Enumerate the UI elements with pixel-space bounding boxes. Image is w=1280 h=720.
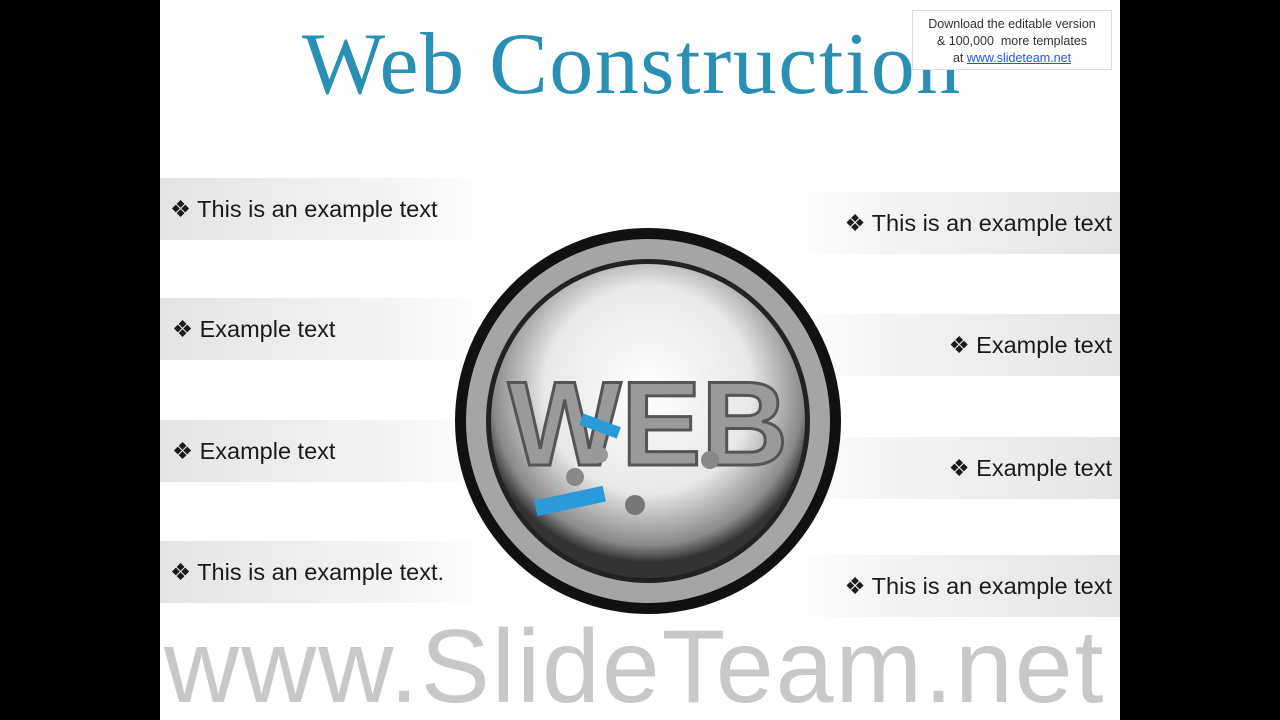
title: Web Construction [302, 16, 962, 113]
left item 2 [160, 298, 490, 360]
left item 1: ❖ This is an example text [170, 196, 438, 222]
left item 3: ❖ Example text [172, 438, 335, 464]
left item 4 [160, 541, 490, 603]
right item 3: ❖ Example text [949, 455, 1112, 481]
download notice box [912, 10, 1112, 70]
WEB letters and tools: WEB [508, 357, 788, 491]
left item 1 [160, 178, 490, 240]
ring [455, 228, 841, 614]
right item 1: ❖ This is an example text [844, 210, 1112, 236]
right item 4: ❖ This is an example text [844, 573, 1112, 599]
left item 4: ❖ This is an example text. [170, 559, 444, 585]
download notice box: & 100,000 more templates [937, 34, 1087, 48]
central circle graphic [455, 228, 841, 614]
right item 2: ❖ Example text [949, 332, 1112, 358]
left item 2: ❖ Example text [172, 316, 335, 342]
right item 3 [790, 437, 1120, 499]
download notice box: at www.slideteam.net [953, 51, 1071, 65]
download notice box: Download the editable version [928, 17, 1096, 31]
right item 4 [790, 555, 1120, 617]
left item 3 [160, 420, 490, 482]
right item 2 [790, 314, 1120, 376]
right item 1 [790, 192, 1120, 254]
